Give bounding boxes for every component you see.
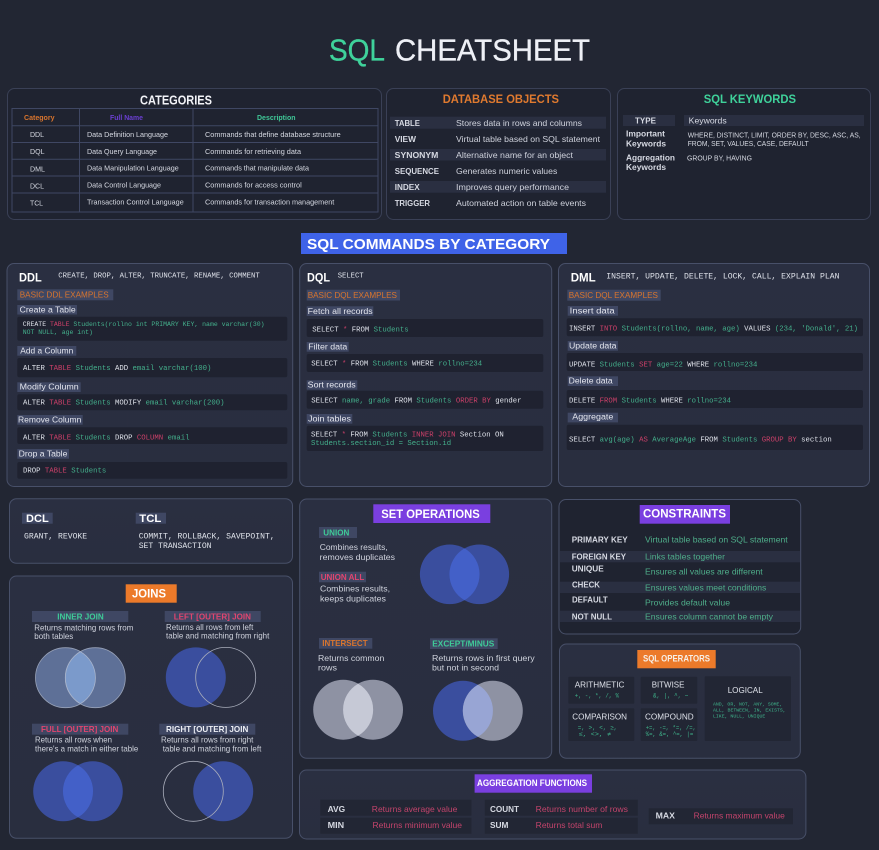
row: synonym: SYNONYM [395,150,438,160]
operators: logical: ALL, BETWEEN, IN, EXISTS, [713,708,786,714]
example: sort records: SELECT name, grade FROM Students ORDER BY gender [311,397,522,405]
categories table: Description [257,113,296,122]
aggregation keywords [626,152,752,172]
except minus [430,638,535,673]
operators: logical: LOGICAL [728,685,763,695]
function: min: Returns minimum value [372,821,462,830]
heading: aggregation functions [475,774,592,793]
row: view: VIEW [395,134,417,144]
tcl [136,513,275,551]
example: modify column [17,382,287,410]
operators: comparison: COMPARISON [572,712,627,722]
important keywords: Important [626,129,665,139]
operators: comparison: =, >, <, ≥, [578,724,617,731]
inner join: both tables [34,631,73,641]
constraint: not null: Ensures column cannot be empty [645,611,774,621]
categories table: Data Definition Language [87,130,168,139]
section heading: BASIC DQL EXAMPLES [569,290,658,300]
heading: joins [126,584,177,603]
heading: set operations: SET OPERATIONS [381,507,480,521]
row: sequence: SEQUENCE [395,166,439,176]
aggregation keywords: GROUP BY, HAVING [687,155,752,162]
categories table: Commands for retrieving data [205,147,302,156]
venn: intersect [313,680,403,740]
heading: categories: CATEGORIES [140,94,212,108]
row: synonym: Alternative name for an object [456,150,574,160]
example: modify column: Modify Column [20,383,79,392]
union all: keeps duplicates [320,593,386,603]
row: sequence: Generates numeric values [456,166,557,176]
left outer join: table and matching from right [166,631,270,641]
constraint: default: Provides default value [645,597,730,607]
row: table [395,118,582,128]
panel: joins [10,576,292,838]
union: UNION [323,527,349,537]
panel: sql keywords [618,88,870,220]
function: sum: SUM [490,821,509,830]
left outer join: LEFT [OUTER] JOIN [174,611,251,621]
union all: Combines results, [320,584,390,594]
categories table: DDL [30,130,44,139]
panel: constraints [559,500,801,634]
venn: right join [163,761,253,821]
heading: database objects: DATABASE OBJECTS [443,92,559,106]
constraint: check: CHECK [572,580,600,590]
venn: except [433,681,523,741]
dml heading: DML [571,270,596,284]
example: sort records [307,380,543,409]
row: table: Stores data in rows and columns [456,118,582,128]
full outer join [32,724,139,821]
dql heading: DQL [307,270,330,284]
panel: set operations [300,499,552,758]
ddl commands: CREATE, DROP, ALTER, TRUNCATE, RENAME, COMMENT [58,273,260,281]
constraint: default [572,594,730,607]
example: update data: UPDATE Students SET age=22 WHERE rollno=234 [569,361,758,369]
example: modify column: ALTER TABLE Students MODIFY email varchar(200) [23,400,224,408]
function: avg: Returns average value [372,805,458,814]
inner join [32,611,133,708]
operators: compound: COMPOUND [645,712,694,722]
example: delete data: Delete data [569,377,613,386]
example: remove column: Remove Column [18,416,81,425]
union all [319,572,390,603]
example: add a column: ALTER TABLE Students ADD email varchar(100) [23,365,211,373]
function: sum: Returns total sum [536,821,603,830]
aggregation keywords: Keywords [626,162,666,172]
panel: sql operators [560,644,800,758]
panel: dcl and tcl [10,499,292,563]
row: trigger [395,198,586,208]
tcl: COMMIT, ROLLBACK, SAVEPOINT, [139,532,275,541]
categories table: Category [24,113,55,122]
constraint: foreign key: FOREIGN KEY [572,551,626,561]
categories table: Commands for transaction management [205,198,334,206]
example: create a table [17,305,287,341]
heading: sql keywords: SQL KEYWORDS [704,92,796,106]
example: join tables: SELECT * FROM Students INNER JOIN Section ON [311,431,504,439]
dcl [22,513,87,541]
intersect [318,638,385,673]
example: sort records: Sort records [308,381,356,390]
panel: dml [558,264,870,486]
right outer join [159,724,262,821]
example: insert data: INSERT INTO Students(rollno, name, age) VALUES (234, 'Donald', 21) [569,325,858,333]
operators: arithmetic [568,677,634,704]
categories table: Full Name [110,113,143,122]
constraint: unique [572,563,763,576]
right outer join: Returns all rows from right [161,735,254,745]
operators: bitwise [641,677,697,704]
example: fetch all records [307,306,543,337]
venn: inner join [36,648,125,708]
ddl heading: DDL [19,270,42,284]
right outer join: table and matching from left [163,744,262,754]
constraint: default: DEFAULT [572,594,609,604]
panel: database objects [386,88,610,220]
important keywords: WHERE, DISTINCT, LIMIT, ORDER BY, DESC, ASC, AS, [688,133,861,140]
except minus: but not in second [432,663,499,673]
example: insert data: Insert data [570,306,615,315]
example: filter data: SELECT * FROM Students WHERE rollno=234 [311,360,483,368]
dml commands: INSERT, UPDATE, DELETE, LOCK, CALL, EXPLAIN PLAN [606,273,840,282]
panel: categories [8,88,382,220]
example: join tables: Students.section_id = Section.id [311,440,451,448]
constraint: check: Ensures values meet conditions [645,582,766,592]
aggregation keywords: Aggregation [626,152,675,162]
categories table: DCL [30,182,44,190]
venn: left join [166,647,256,707]
section heading: BASIC DQL EXAMPLES [308,290,397,300]
categories table: Data Control Language [87,180,161,190]
constraint: primary key: Virtual table based on SQL statement [645,535,788,545]
dcl: DCL [26,513,49,525]
panel: aggregation functions [300,770,806,839]
categories table [12,108,378,212]
panel: ddl [7,264,293,486]
function: max: Returns maximum value [694,812,785,821]
left outer join: Returns all rows from left [166,622,254,632]
left outer join [165,611,270,707]
row: synonym [395,150,574,160]
example: drop a table: Drop a Table [19,450,68,459]
operators: logical: LIKE, NULL, UNIQUE [713,713,765,719]
row: index: INDEX [395,182,420,192]
dql commands: SELECT [338,273,364,281]
function: max [649,808,793,824]
function: sum [485,818,638,834]
banner: sql commands by category: SQL COMMANDS BY CATEGORY [307,236,550,253]
categories table: Transaction Control Language [87,198,184,206]
operators: logical: AND, OR, NOT, ANY, SOME, [713,702,782,708]
heading: set operations [373,504,490,523]
operators: compound [641,708,697,741]
operators: bitwise: BITWISE [652,680,685,690]
constraint: not null [572,611,774,621]
inner join: Returns matching rows from [34,622,133,632]
constraint: unique: Ensures all values are different [645,566,763,576]
example: delete data [567,376,863,408]
operators: compound: +=, -=, *=, /=, [646,724,696,731]
heading: joins: JOINS [132,589,166,601]
full outer join: there's a match in either table [35,743,139,753]
venn: union [420,544,509,604]
except minus: EXCEPT/MINUS [432,639,495,649]
categories table: Data Manipulation Language [87,164,179,172]
example: insert data [567,306,863,336]
tcl: TCL [139,513,162,525]
example: delete data: DELETE FROM Students WHERE rollno=234 [569,398,732,406]
heading: sql operators: SQL OPERATORS [643,654,710,664]
example: create a table: CREATE TABLE Students(rollno int PRIMARY KEY, name varchar(30) [23,321,265,328]
except minus: Returns rows in first query [432,653,535,663]
categories table: DML [30,164,45,174]
row: view: Virtual table based on SQL statement [456,134,601,144]
row: index [395,182,569,192]
operators: bitwise: &, |, ^, ~ [653,692,689,699]
union [319,527,395,562]
intersect: Returns common [318,653,385,663]
union: Combines results, [320,542,388,552]
example: fetch all records: Fetch all records [308,307,373,316]
example: aggregate: SELECT avg(age) AS AverageAge FROM Students GROUP BY section [569,437,832,445]
example: update data [567,341,863,371]
categories table: Commands for access control [205,180,302,190]
categories table: TCL [30,198,43,208]
operators: arithmetic: ARITHMETIC [575,680,624,690]
categories table: Commands that define database structure [205,130,341,139]
union: removes duplicates [320,552,395,562]
example: remove column: ALTER TABLE Students DROP COLUMN email [23,434,189,442]
operators: comparison: ≤, <>, ≠ [579,731,611,738]
row: sequence [395,166,557,176]
example: join tables: Join tables [308,415,351,424]
example: add a column [17,346,287,377]
function: min: MIN [328,821,344,830]
operators: logical [705,676,791,741]
function: avg: AVG [328,805,345,814]
panel: sql keywords: Keywords [689,116,727,126]
full outer join: Returns all rows when [35,735,112,745]
venn: full join [33,761,123,821]
row: view [395,134,601,144]
example: drop a table: DROP TABLE Students [23,468,106,476]
constraint: primary key: PRIMARY KEY [572,535,628,545]
example: create a table: Create a Table [20,306,76,315]
union all: UNION ALL [321,572,364,582]
heading: aggregation functions: AGGREGATION FUNCTIONS [477,778,587,788]
row: trigger: TRIGGER [395,198,431,208]
function: count [485,800,638,816]
categories table: DQL [30,147,44,156]
function: avg [320,800,472,816]
example: aggregate [567,412,863,450]
inner join: INNER JOIN [57,611,104,621]
example: aggregate: Aggregate [572,412,614,421]
constraint: check [572,580,766,592]
example: create a table: NOT NULL, age int) [23,329,93,336]
title: CHEATSHEET [395,32,590,68]
operators: compound: %=, &=, ^=, |= [646,731,694,738]
heading: sql operators [637,650,716,668]
row: index: Improves query performance [456,182,569,192]
operators: comparison [568,708,634,741]
constraint: primary key [572,535,788,545]
intersect: rows [318,663,337,673]
right outer join: RIGHT [OUTER] JOIN [166,724,248,734]
constraint: not null: NOT NULL [572,611,612,621]
example: add a column: Add a Column [20,347,73,356]
intersect: INTERSECT [322,638,368,648]
full outer join: FULL [OUTER] JOIN [41,724,118,734]
example: filter data: Filter data [308,343,348,352]
heading: constraints: CONSTRAINTS [643,506,726,520]
constraint: foreign key: Links tables together [645,551,725,561]
constraint: foreign key [572,551,725,561]
function: count: COUNT [490,805,519,814]
panel: dql [300,264,552,486]
function: count: Returns number of rows [536,805,628,814]
categories table: Data Query Language [87,147,157,156]
function: max: MAX [656,812,676,821]
example: join tables [307,414,543,451]
function: min [320,818,472,834]
panel: sql keywords: TYPE [635,116,656,126]
dcl: GRANT, REVOKE [24,532,87,541]
example: filter data [307,342,543,372]
row: trigger: Automated action on table events [456,198,586,208]
example: drop a table [17,449,287,479]
categories table: Commands that manipulate data [205,164,310,172]
example: fetch all records: SELECT * FROM Students [312,326,409,334]
important keywords: Keywords [626,139,666,149]
tcl: SET TRANSACTION [139,542,212,551]
section heading: BASIC DDL EXAMPLES [20,290,109,300]
title: SQL [329,32,385,68]
important keywords [626,129,861,149]
example: remove column [17,415,287,444]
example: update data: Update data [569,341,617,350]
important keywords: FROM, SET, VALUES, CASE, DEFAULT [688,141,809,148]
constraint: unique: UNIQUE [572,563,604,573]
operators: arithmetic: +, -, *, /, % [575,692,619,699]
row: table: TABLE [395,118,420,128]
